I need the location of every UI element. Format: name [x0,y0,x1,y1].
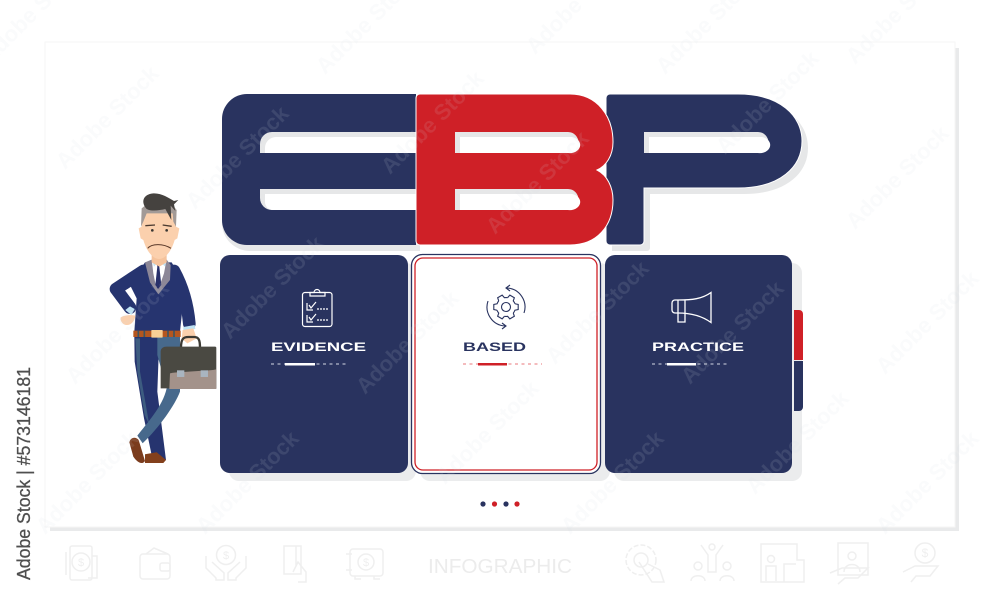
slots: B [455,132,580,210]
watermark pattern: Adobe Stock [871,265,984,379]
watermark pattern: Adobe Stock [741,385,854,499]
watermark pattern: Adobe Stock [841,120,954,234]
cuffs and hands [125,306,135,315]
icon: wallet [140,548,170,579]
neck [152,252,167,267]
sweater and arms [116,271,189,324]
icon: safe [346,549,383,579]
icon: hands with coin: $ [223,550,229,562]
collar [145,260,171,294]
watermark pattern: Adobe Stock [181,100,294,214]
heading: based: BASED [463,340,526,354]
standing leg [134,337,166,460]
side tab [794,310,803,411]
icon: megaphone [672,292,711,322]
watermark pattern: Adobe Stock [871,425,984,539]
heading: evidence: EVIDENCE [271,340,366,354]
icon: mobile coin [66,546,97,580]
crossing leg [137,337,180,443]
character: businessman with briefcase [116,193,216,463]
icon: gear with arrows [487,285,525,329]
divider: based [463,363,542,366]
belt [133,331,181,337]
icon: team [691,544,734,581]
footer icons: right group [626,543,938,584]
icon: hand with coin [903,543,938,582]
divider: evidence [271,363,349,366]
icon: hand with portrait [830,543,868,584]
watermark pattern: Adobe Stock [541,255,654,369]
icon: gear click [626,545,664,582]
watermark pattern: Adobe Stock [51,60,164,174]
icon: clipboard [302,290,332,326]
letter: P [606,94,802,245]
icon: card in hand [284,546,306,582]
divider: practice [652,363,730,366]
icon: hands with coin [206,546,246,580]
icon: mobile coin: $ [78,557,84,569]
watermark pattern: Adobe Stock [351,285,464,399]
watermark pattern: Adobe Stock [191,425,304,539]
watermark pattern: Adobe Stock [61,275,174,389]
watermark pattern: Adobe Stock [216,230,329,344]
watermark pattern: Adobe Stock [376,65,489,179]
title letters: EBP [222,94,808,251]
watermark pattern: Adobe Stock [31,425,144,539]
panel: based [412,254,600,474]
face [139,208,179,259]
card shadows [229,263,802,481]
briefcase [181,337,200,348]
panel: practice [605,255,792,473]
letter shadow [222,100,808,251]
letter: E [222,94,416,245]
watermark pattern: Adobe Stock [676,275,789,389]
slot: P [644,132,770,153]
heading: practice: PRACTICE [652,340,744,354]
slots: E [260,132,416,210]
hair [141,202,177,227]
footer icons: faded row [66,546,383,582]
footer label: infographic: INFOGRAPHIC [428,556,572,578]
watermark pattern: Adobe Stock [481,125,594,239]
icon: person puzzle [761,544,804,582]
icon: hand with coin: $ [922,546,929,560]
panel: main white sheet [45,42,959,531]
letter: B [416,94,613,245]
watermark pattern: Adobe Stock [431,375,544,489]
icon: safe: $ [363,557,369,569]
shoes [129,438,145,463]
watermark pattern: Adobe Stock [556,425,669,539]
eyebrows, eyes and mouth [145,225,172,226]
tie [155,261,161,289]
stock credit: Adobe Stock | #573146181 [14,367,34,580]
pagination dots [480,501,520,507]
watermark pattern: Adobe Stock [711,45,824,159]
panel: evidence [220,255,408,473]
